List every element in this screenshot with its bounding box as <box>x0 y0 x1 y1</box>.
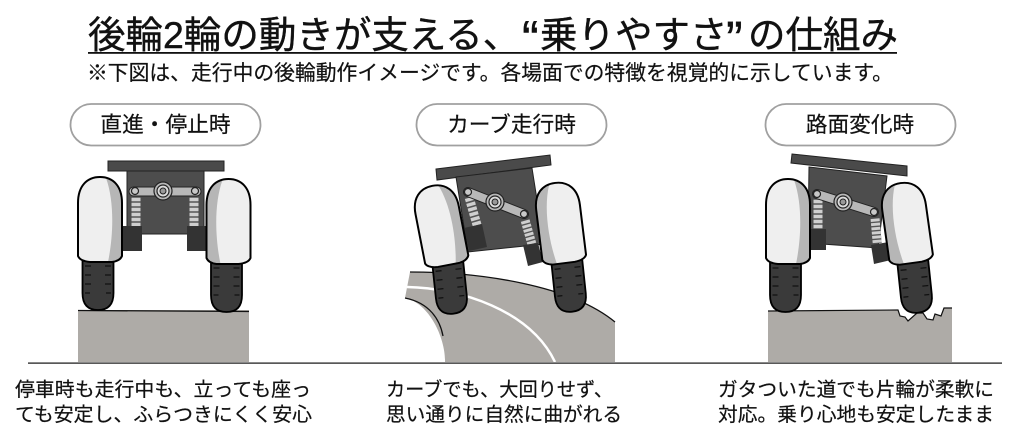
illustration: road surface changes <box>766 154 952 362</box>
right wheel <box>206 179 250 312</box>
horizontal divider <box>28 362 1002 364</box>
label pill: straight and stopped <box>70 104 260 146</box>
title: 乗りやすさ <box>540 14 728 56</box>
label pill: cornering: カーブ走行時 <box>447 112 576 137</box>
label pill: road surface changes: 路面変化時 <box>806 112 914 137</box>
illustration: straight and stopped <box>78 161 250 362</box>
caption: straight and stopped <box>15 379 312 426</box>
caption: cornering: カーブでも、大回りせず、 <box>386 378 613 401</box>
suspension <box>810 190 891 264</box>
label pill: cornering <box>416 104 606 146</box>
caption: straight and stopped: 停車時も走行中も、立っても座っ <box>15 379 311 401</box>
vehicle body <box>791 154 907 248</box>
caption: road surface changes: 対応。乗り心地も安定したまま <box>718 404 994 426</box>
caption: cornering: 思い通りに自然に曲がれる <box>386 404 622 426</box>
label pill: road surface changes <box>766 104 956 146</box>
caption: cornering <box>386 378 622 426</box>
label pill: straight and stopped: 直進・停止時 <box>100 112 231 137</box>
curved road <box>405 272 615 362</box>
title: 後輪2輪の動きが支える、 <box>88 14 520 56</box>
left wheel <box>411 182 469 315</box>
broken ground <box>768 308 952 362</box>
ground <box>78 310 249 362</box>
left wheel <box>766 179 810 312</box>
suspension <box>464 188 543 266</box>
title: ” <box>726 11 743 67</box>
title: の仕組み <box>748 14 898 56</box>
suspension <box>122 182 207 251</box>
vehicle body <box>436 155 551 252</box>
title: “ <box>522 11 539 67</box>
illustration: cornering <box>405 155 615 362</box>
caption: straight and stopped: ても安定し、ふらつきにくく安心 <box>15 404 312 426</box>
right wheel <box>533 180 588 313</box>
subtitle note: ※下図は、走行中の後輪動作イメージです。各場面での特徴を視覚的に示しています。 <box>87 62 893 85</box>
left wheel <box>78 177 122 310</box>
caption: road surface changes <box>718 379 994 426</box>
right wheel <box>879 180 934 314</box>
caption: road surface changes: ガタついた道でも片輪が柔軟に <box>718 379 994 401</box>
title <box>88 11 898 67</box>
vehicle body <box>108 161 224 234</box>
